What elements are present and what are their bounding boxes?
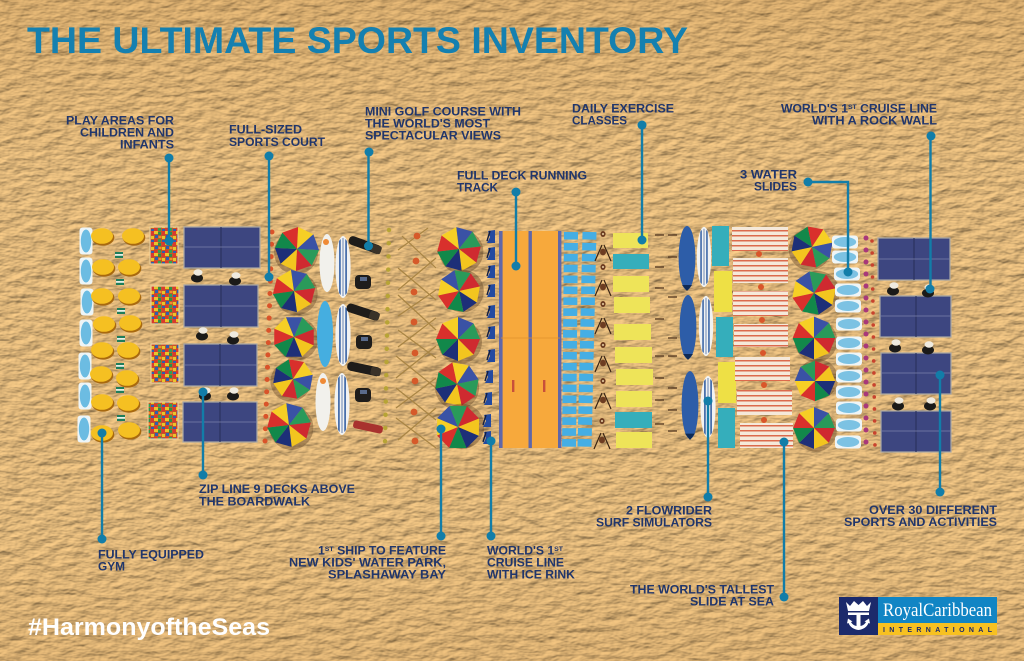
callout: water park: [289, 424, 446, 582]
callout: play areas: PLAY AREAS FOR: [66, 116, 175, 128]
callout: zip line: ZIP LINE 9 DECKS ABOVE: [199, 484, 355, 496]
callout: mini golf: THE WORLD'S MOST: [365, 118, 490, 130]
callout: mini golf: SPECTACULAR VIEWS: [365, 130, 501, 142]
callout: sports court: FULL-SIZED: [229, 124, 302, 136]
callout: water park: SHIP TO FEATURE: [334, 546, 446, 558]
callout: gym: [98, 428, 204, 574]
callout: exercise classes: DAILY EXERCISE: [572, 104, 674, 116]
callout: rock wall: WORLD'S 1: [781, 104, 844, 116]
callout: rock wall: WITH A ROCK WALL: [812, 116, 937, 128]
callout: gym: GYM: [98, 562, 125, 574]
umbrellas water park: [425, 224, 492, 458]
gym mats: [78, 228, 94, 442]
callout: zip line: THE BOARDWALK: [199, 496, 311, 508]
golf balls: [385, 230, 389, 442]
purple and red balls: [866, 238, 875, 448]
ball pits: [148, 227, 179, 439]
callout: water slides: 3 WATER: [740, 170, 798, 182]
callout: tallest slide: THE WORLD'S TALLEST: [630, 584, 774, 596]
umbrellas right: [784, 222, 848, 452]
callout: water park: ST: [325, 546, 334, 553]
callout: flowrider: [596, 396, 713, 530]
logo: Royal Caribbean International: INTERNATIONAL: [883, 627, 993, 634]
callout: ice rink: WORLD'S 1: [487, 546, 550, 558]
orange items between towels: [756, 251, 767, 423]
callout: play areas: [66, 116, 175, 246]
callout: mini golf: MINI GOLF COURSE WITH: [365, 106, 521, 118]
running track: [499, 231, 561, 448]
callout: mini golf: [364, 106, 521, 250]
logo: Royal Caribbean International: [839, 597, 997, 635]
callout: water park: 1: [318, 546, 324, 558]
callout: sports court: SPORTS COURT: [229, 137, 325, 149]
callout: sports court: [229, 124, 325, 282]
callout: running track: FULL DECK RUNNING: [457, 170, 587, 182]
sports courts right: [878, 238, 951, 452]
callout: flowrider: 2 FLOWRIDER: [626, 506, 713, 518]
umbrellas left: [264, 218, 329, 452]
callout: play areas: CHILDREN AND: [80, 128, 174, 140]
callout: 30 activities: SPORTS AND ACTIVITIES: [844, 517, 997, 529]
players left: [191, 269, 241, 400]
icon: crown and anchor: [846, 601, 871, 630]
flowrider surfboards: [679, 226, 716, 440]
callout: ice rink: CRUISE LINE: [487, 558, 564, 570]
callout: running track: TRACK: [457, 182, 499, 194]
callout: tallest slide: [630, 438, 788, 608]
exercise mats: [613, 233, 653, 448]
callout: rock wall: CRUISE LINE: [857, 104, 937, 116]
striped towels: [732, 227, 793, 448]
callout: ice rink: WITH ICE RINK: [487, 570, 576, 582]
kick boards: [569, 232, 590, 448]
callout: play areas: INFANTS: [120, 140, 174, 152]
callout: ice rink: [486, 436, 576, 582]
callout: water slides: SLIDES: [754, 182, 797, 194]
logo: Royal Caribbean International: RoyalCaribbean: [883, 600, 992, 621]
beach mats: [712, 226, 736, 448]
callout: rock wall: ST: [848, 104, 857, 111]
sports courts left: [183, 227, 260, 442]
callout: zip line: [198, 388, 355, 508]
panel: sports inventory layout: [78, 218, 951, 458]
callout: exercise classes: CLASSES: [572, 116, 627, 128]
ice skates: [483, 230, 495, 444]
orange markers: [265, 232, 272, 442]
callout: 30 activities: OVER 30 DIFFERENT: [869, 505, 997, 517]
callout: water park: NEW KIDS' WATER PARK,: [289, 558, 446, 570]
callout: exercise classes: [572, 104, 674, 244]
hashtag: #HarmonyoftheSeas: [28, 614, 270, 641]
callout: ice rink: ST: [554, 546, 563, 553]
exercise tripods: [594, 231, 611, 449]
callout: 30 activities: [844, 370, 997, 529]
golf bags: [345, 235, 384, 434]
callout: running track: [457, 170, 587, 270]
players right: [887, 282, 936, 410]
yellow gym equipment: [90, 228, 145, 443]
callout: tallest slide: SLIDE AT SEA: [690, 596, 774, 608]
surfboards left: [316, 234, 351, 435]
callout: flowrider: SURF SIMULATORS: [596, 518, 712, 530]
exercise shoes marks: [655, 235, 677, 431]
callout: rock wall: [781, 104, 937, 294]
water slides: [832, 236, 862, 448]
callout: gym: FULLY EQUIPPED: [98, 550, 204, 562]
title: THE ULTIMATE SPORTS INVENTORY: [27, 19, 688, 61]
callout: water park: SPLASHAWAY BAY: [328, 570, 446, 582]
callout: water slides: [740, 170, 852, 276]
mini golf holes: [396, 228, 436, 448]
